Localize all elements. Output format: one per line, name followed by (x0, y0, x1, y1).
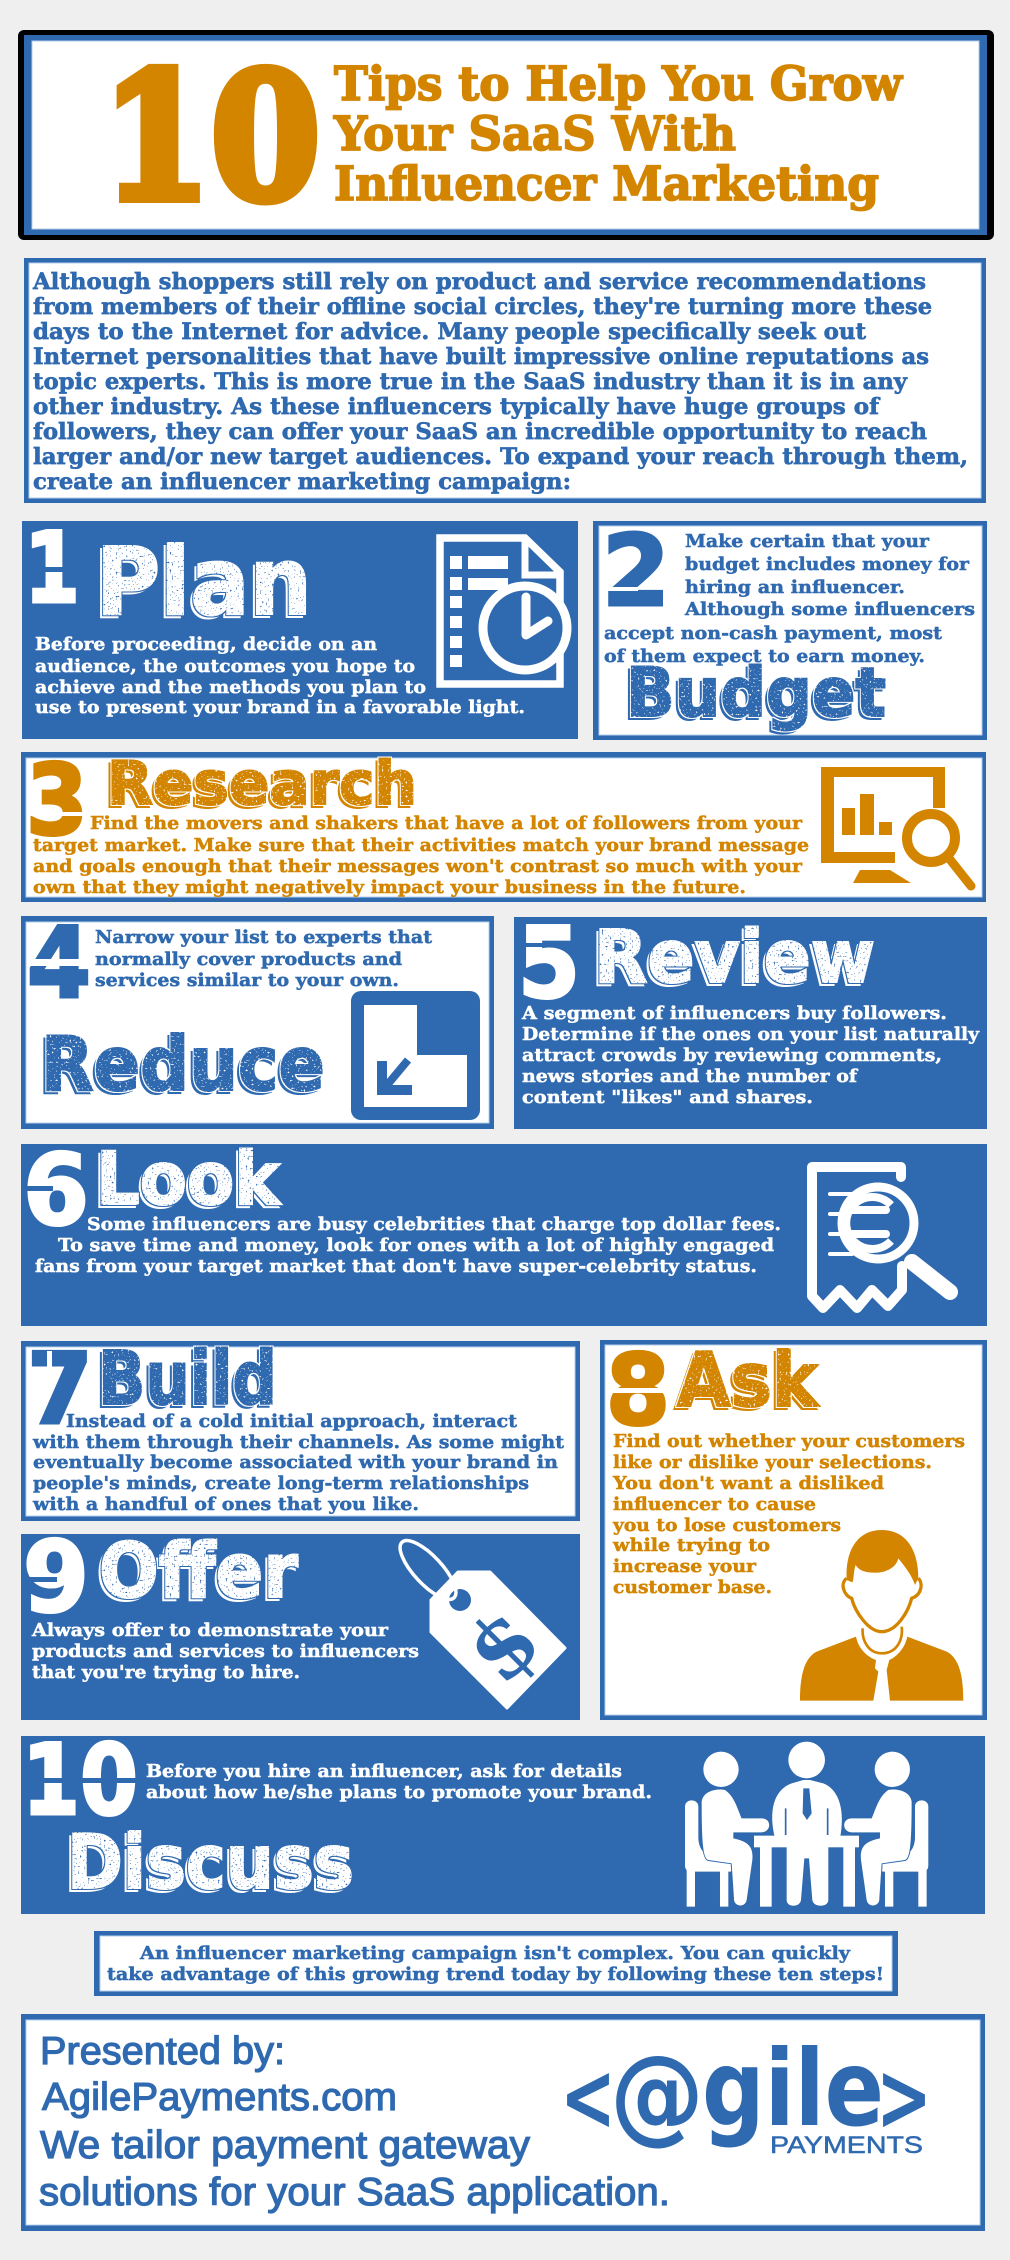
offer text (31, 1620, 419, 1683)
intro text: days to the Internet for advice. Many people specifically seek out (33, 319, 867, 345)
heading: Plan: Plan (96, 528, 312, 637)
budget text: Make certain that your (685, 531, 930, 552)
callout: closing message: take advantage of this growing trend today by following these ten steps! (107, 1964, 884, 1985)
panel: 2 budget (593, 515, 987, 740)
plan text: use to present your brand in a favorable light. (35, 697, 525, 718)
ask text: you to lose customers (612, 1515, 841, 1536)
build text: Instead of a cold initial approach, interact (66, 1411, 518, 1432)
review text: news stories and the number of (522, 1066, 858, 1087)
budget text: hiring an influencer. (685, 577, 905, 598)
title text (333, 57, 903, 212)
panel: introduction (24, 258, 986, 503)
logo: agile payments: < (560, 2043, 616, 2153)
ask text (612, 1431, 965, 1598)
icon: receipt with magnifier (812, 1167, 950, 1308)
review text (521, 1003, 980, 1108)
intro text: larger and/or new target audiences. To expand your reach through them, (33, 444, 968, 470)
heading: Reduce: Reduce (41, 1020, 325, 1108)
logo: agile payments: @ (610, 2033, 704, 2155)
intro text: other industry. As these influencers typically have huge groups of (33, 394, 881, 420)
presented by text: Presented by: (40, 2030, 285, 2073)
intro text: Internet personalities that have built impressive online reputations as (33, 344, 929, 370)
number 6: 6 (23, 1134, 89, 1248)
ask text: influencer to cause (613, 1494, 816, 1515)
build text: with a handful of ones that you like. (32, 1494, 419, 1515)
callout: closing message (94, 1931, 898, 1996)
research text: own that they might negatively impact your business in the future. (33, 877, 746, 898)
number 4: 4 (27, 907, 91, 1021)
discuss text: Before you hire an influencer, ask for details (146, 1761, 622, 1782)
icon: resize square with arrow (351, 991, 480, 1120)
intro text: create an influencer marketing campaign: (33, 469, 571, 495)
look text: Some influencers are busy celebrities that charge top dollar fees. (87, 1214, 781, 1235)
reduce text: services similar to your own. (95, 970, 399, 991)
budget text: budget includes money for (685, 554, 970, 575)
number 5: 5 (518, 907, 580, 1021)
reduce text: normally cover products and (95, 949, 402, 970)
heading: Review: Review (594, 915, 875, 1000)
number 9: 9 (23, 1521, 89, 1635)
review text: content "likes" and shares. (522, 1087, 813, 1108)
offer text: Always offer to demonstrate your (31, 1620, 389, 1641)
presented by text: solutions for your SaaS application. (39, 2171, 670, 2214)
icon: price tag with dollar sign (392, 1533, 565, 1708)
logo: agile payments: PAYMENTS (770, 2132, 923, 2159)
build text: eventually become associated with your brand in (33, 1452, 558, 1473)
number 10: 10 (22, 1724, 138, 1838)
ask text: customer base. (613, 1577, 772, 1598)
heading: Ask: Ask (677, 1336, 820, 1424)
plan text: audience, the outcomes you hope to (35, 656, 415, 677)
heading: Offer: Offer (99, 1526, 298, 1615)
icon: three people at a table (685, 1742, 928, 1907)
title text: Influencer Marketing (334, 157, 879, 212)
title text: Your SaaS With (333, 107, 736, 162)
heading: Research: Research (107, 749, 417, 819)
icon: person (800, 1530, 963, 1701)
heading: Budget: Budget (626, 654, 886, 733)
heading: Build: Build (98, 1336, 277, 1422)
panel: 7 build (21, 1333, 580, 1521)
look text (35, 1214, 781, 1277)
budget text: accept non-cash payment, most (604, 623, 943, 644)
panel: 5 review (514, 907, 987, 1129)
icon: document with clock (440, 538, 567, 684)
logo: agile payments: > (876, 2043, 932, 2153)
heading: Discuss: Discuss (67, 1818, 354, 1906)
intro text: Although shoppers still rely on product and service recommendations (32, 269, 926, 295)
intro text: from members of their offline social circles, they're turning more these (33, 294, 932, 320)
research text: target market. Make sure that their activities match your brand message (33, 835, 809, 856)
ask text: like or dislike your selections. (613, 1452, 932, 1473)
logo: agile payments (560, 2028, 932, 2159)
number 7: 7 (27, 1333, 93, 1447)
review text: attract crowds by reviewing comments, (522, 1045, 942, 1066)
discuss text (146, 1761, 652, 1803)
callout: closing message: An influencer marketing campaign isn't complex. You can quickly (139, 1943, 851, 1964)
intro text: topic experts. This is more true in the SaaS industry than it is in any (33, 369, 908, 395)
icon: price tag with dollar sign: $ (446, 1589, 560, 1703)
presented by text: AgilePayments.com (42, 2076, 397, 2119)
budget text: Although some influencers (684, 599, 975, 620)
panel: 10 discuss (21, 1724, 985, 1914)
logo: agile payments: gile (702, 2028, 884, 2150)
title panel (18, 30, 994, 240)
number 8: 8 (606, 1334, 670, 1448)
ask text: You don't want a disliked (612, 1473, 884, 1494)
budget text (604, 531, 975, 667)
ask text: while trying to (612, 1535, 770, 1556)
intro text: followers, they can offer your SaaS an incredible opportunity to reach (33, 419, 927, 445)
panel: 1 plan (22, 512, 578, 739)
title number 10: 10 (102, 36, 320, 240)
number 1: 1 (24, 512, 80, 626)
offer text: products and services to influencers (32, 1641, 419, 1662)
panel: presented by footer (21, 2014, 985, 2231)
presented by text: We tailor payment gateway (40, 2124, 531, 2167)
research text: Find the movers and shakers that have a lot of followers from your (90, 813, 803, 834)
presented by text (39, 2030, 670, 2214)
plan text: achieve and the methods you plan to (35, 677, 426, 698)
plan text (35, 634, 525, 718)
build text: with them through their channels. As some might (32, 1432, 565, 1453)
plan text: Before proceeding, decide on an (35, 634, 377, 655)
title text: Tips to Help You Grow (334, 57, 903, 112)
intro text (32, 269, 968, 495)
discuss text: about how he/she plans to promote your brand. (146, 1782, 652, 1803)
review text: Determine if the ones on your list naturally (522, 1024, 980, 1045)
research text (33, 813, 809, 898)
panel: 8 ask (600, 1334, 987, 1720)
research text: and goals enough that their messages won't contrast so much with your (33, 856, 803, 877)
look text: To save time and money, look for ones with a lot of highly engaged (58, 1235, 774, 1256)
icon: monitor with magnifier (821, 767, 971, 886)
budget text: of them expect to earn money. (604, 646, 925, 667)
look text: fans from your target market that don't have super-celebrity status. (35, 1256, 757, 1277)
reduce text: Narrow your list to experts that (95, 927, 433, 948)
panel: 3 research (21, 744, 986, 902)
reduce text (95, 927, 433, 991)
panel: 4 reduce (21, 907, 494, 1129)
panel: 6 look (21, 1134, 987, 1326)
panel: 9 offer (21, 1521, 580, 1720)
number 2: 2 (602, 515, 670, 629)
build text (32, 1411, 565, 1515)
review text: A segment of influencers buy followers. (521, 1003, 947, 1024)
ask text: Find out whether your customers (613, 1431, 965, 1452)
offer text: that you're trying to hire. (32, 1662, 300, 1683)
ask text: increase your (613, 1556, 757, 1577)
build text: people's minds, create long-term relationships (33, 1473, 529, 1494)
heading: Look: Look (96, 1137, 281, 1222)
number 3: 3 (26, 744, 88, 858)
